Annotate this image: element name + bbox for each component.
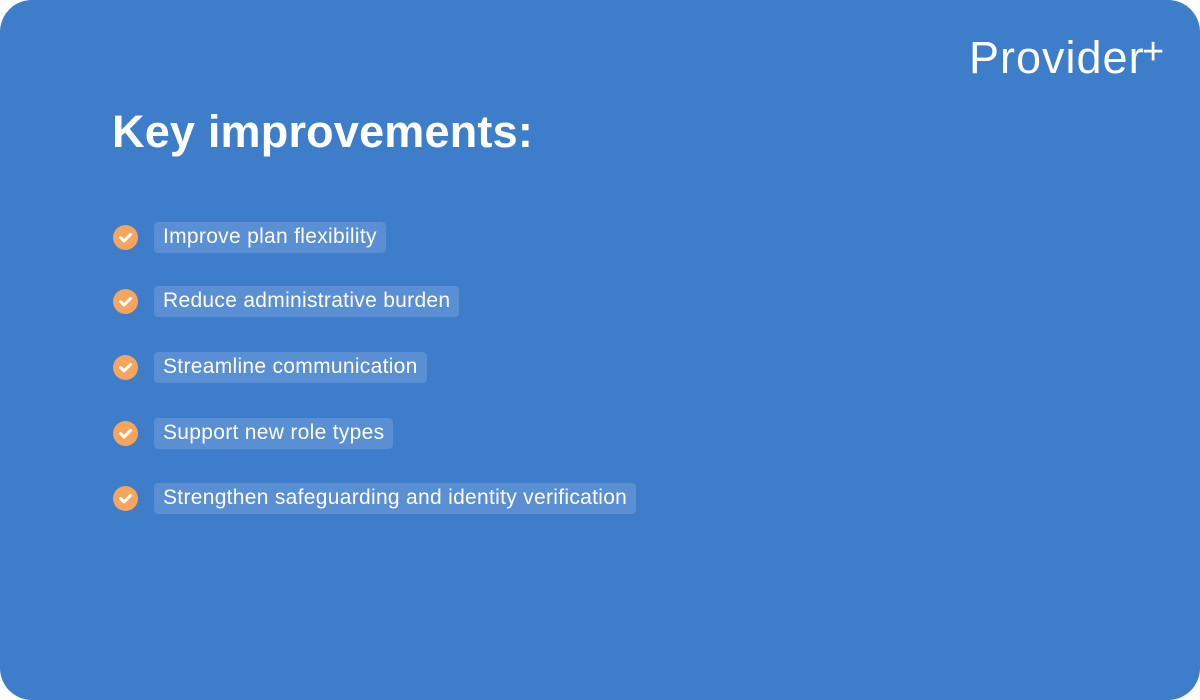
label [154,418,393,449]
icon: check [113,486,138,511]
logo: Provider [969,32,1145,83]
item: communication [113,352,427,383]
icon: check [113,225,138,250]
label: Streamline communication [163,355,418,378]
label [154,352,427,383]
label [154,222,386,253]
label: Strengthen safeguarding and identity verification [163,486,627,509]
label: Support new role types [163,421,384,444]
icon: check [113,355,138,380]
label: Reduce administrative burden [163,289,450,312]
item: safeguarding [113,483,636,514]
item: admin burden [113,286,459,317]
label: Improve plan flexibility [163,225,377,248]
title: Key improvements: [112,106,533,157]
item: plan flexibility [113,222,386,253]
label [154,286,459,317]
logo plus: + [1142,31,1164,73]
icon: check [113,421,138,446]
item: role types [113,418,393,449]
icon: check [113,289,138,314]
